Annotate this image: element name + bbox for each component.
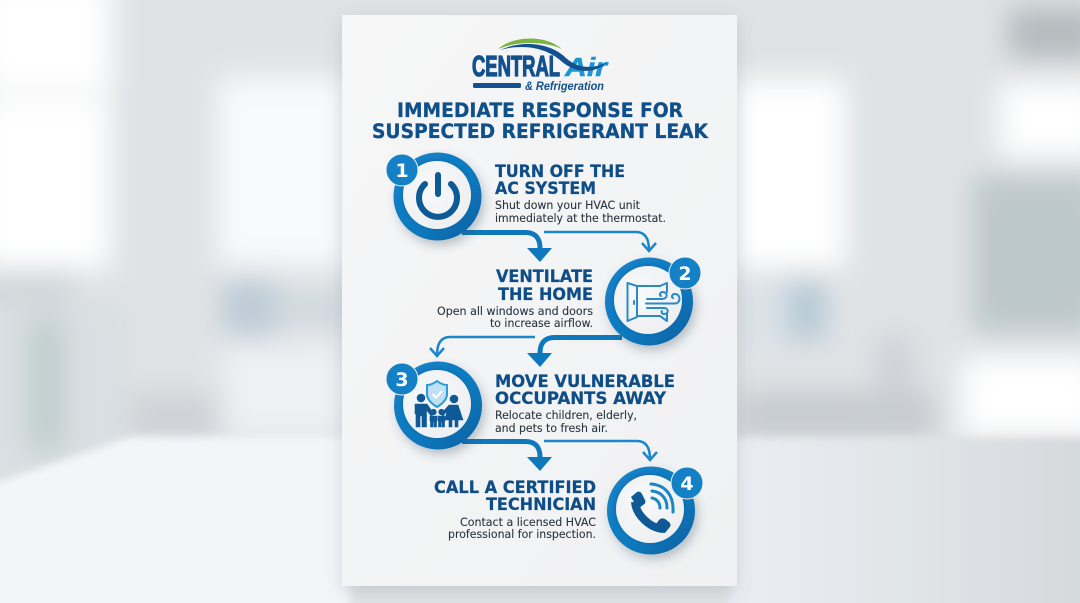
step 2 [437, 257, 701, 346]
step 4 number badge [671, 467, 703, 499]
step 2 number badge: 2 [678, 263, 692, 285]
logo: Central Air & Refrigeration: CENTRAL [472, 51, 560, 83]
step 1 text [495, 162, 666, 225]
step 4 text [434, 478, 596, 541]
step 1 [386, 152, 666, 240]
step 1 text: TURN OFF THE [495, 162, 625, 182]
step 1 number badge: 1 [395, 160, 409, 182]
logo: Central Air & Refrigeration: & Refrigeration [525, 81, 604, 93]
step 3 text: Relocate children, elderly, [495, 408, 637, 422]
icon: power [419, 175, 457, 217]
title: SUSPECTED REFRIGERANT LEAK [372, 120, 709, 143]
step 1 text: Shut down your HVAC unit [495, 198, 640, 212]
step 2 text: to increase airflow. [490, 316, 593, 330]
step 3 number badge [386, 363, 418, 395]
step 2 text: THE HOME [498, 285, 593, 305]
step 4 circle [607, 466, 695, 554]
step 2 circle [605, 258, 693, 346]
step 1 text: immediately at the thermostat. [495, 211, 666, 225]
step 2 number badge [669, 257, 701, 289]
icon: open door with wind [628, 283, 680, 321]
arrow: step 3 to step 4 [462, 441, 657, 471]
step 4 text: professional for inspection. [448, 527, 596, 541]
logo: Central Air & Refrigeration: Air [564, 52, 609, 82]
logo: Central Air & Refrigeration [472, 38, 609, 93]
step 4 [434, 466, 703, 554]
step 3 text: and pets to fresh air. [495, 421, 608, 435]
step 2 text: VENTILATE [496, 267, 593, 287]
step 3 text [495, 372, 675, 435]
step 2 text: Open all windows and doors [437, 304, 593, 318]
step 3 number badge: 3 [395, 369, 409, 391]
step 3 text: OCCUPANTS AWAY [495, 389, 667, 409]
step 3 text: MOVE VULNERABLE [495, 372, 675, 392]
step 1 circle [394, 152, 482, 240]
step 1 text: AC SYSTEM [495, 179, 596, 199]
step 2 text [437, 267, 593, 330]
step 4 text: CALL A CERTIFIED [434, 478, 596, 498]
step 4 text: Contact a licensed HVAC [460, 515, 596, 529]
floor [0, 437, 1080, 603]
icon: phone with signal waves [631, 484, 673, 533]
poster card [342, 15, 737, 586]
step 1 number badge [386, 154, 418, 186]
arrow: step 1 to step 2 [462, 232, 656, 262]
step 3 circle [394, 362, 482, 450]
title: IMMEDIATE RESPONSE FOR [397, 99, 683, 122]
step 4 number badge: 4 [680, 473, 694, 495]
icon: family with shield [415, 381, 463, 427]
arrow: step 2 to step 3 [430, 337, 622, 367]
title [372, 99, 709, 143]
step 4 text: TECHNICIAN [486, 495, 596, 515]
step 3 [386, 362, 675, 450]
